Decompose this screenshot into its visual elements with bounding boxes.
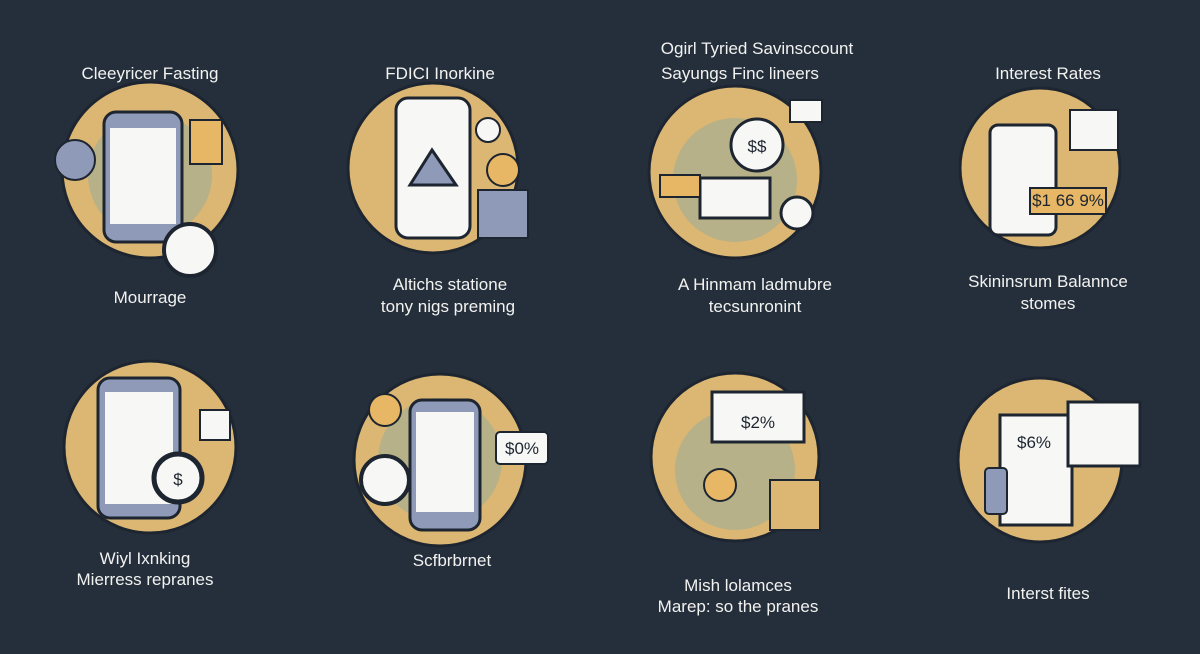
panel: 3: $$ xyxy=(748,137,767,156)
panel: 3: tecsunronint xyxy=(709,297,802,316)
panel: 8: $6% xyxy=(1017,433,1051,452)
panel: 6 xyxy=(354,374,548,570)
panel: 8: Interst fites xyxy=(1006,584,1090,603)
panel: 8 xyxy=(958,378,1140,603)
panel: 6: Scfbrbrnet xyxy=(413,551,491,570)
panel: 5: Wiyl Ixnking xyxy=(100,549,190,568)
panel: 6: $0% xyxy=(505,439,539,458)
panel: 1 xyxy=(55,64,238,307)
panel: 7: $2% xyxy=(741,413,775,432)
panel: 4: Interest Rates xyxy=(995,64,1101,83)
panel: 7: Mish lolamces xyxy=(684,576,792,595)
panel: 1: Mourrage xyxy=(114,288,186,307)
panel: 5: $ xyxy=(173,470,183,489)
title: Ogirl Tyried Savinsccount xyxy=(661,39,853,58)
panel: 2 xyxy=(348,64,528,316)
panel: 7: Marep: so the pranes xyxy=(658,597,818,616)
panel: 4: stomes xyxy=(1021,294,1075,313)
panel: 2: FDICI Inorkine xyxy=(385,64,495,83)
panel: 3: A Hinmam ladmubre xyxy=(678,275,832,294)
panel: 2: Altichs statione xyxy=(393,275,507,294)
panel: 4: Skininsrum Balannce xyxy=(968,272,1128,291)
panel: 2: tony nigs preming xyxy=(381,297,515,316)
panel: 4: $1 66 9% xyxy=(1032,191,1104,210)
panel: 3 xyxy=(649,64,832,316)
panel: 4 xyxy=(960,64,1128,313)
panel: 3: Sayungs Finc lineers xyxy=(661,64,819,83)
panel: 5: Mierress repranes xyxy=(76,570,214,589)
panel: 1: Cleeyricer Fasting xyxy=(82,64,218,83)
panel: 7 xyxy=(651,373,820,616)
panel: 5 xyxy=(64,361,236,589)
